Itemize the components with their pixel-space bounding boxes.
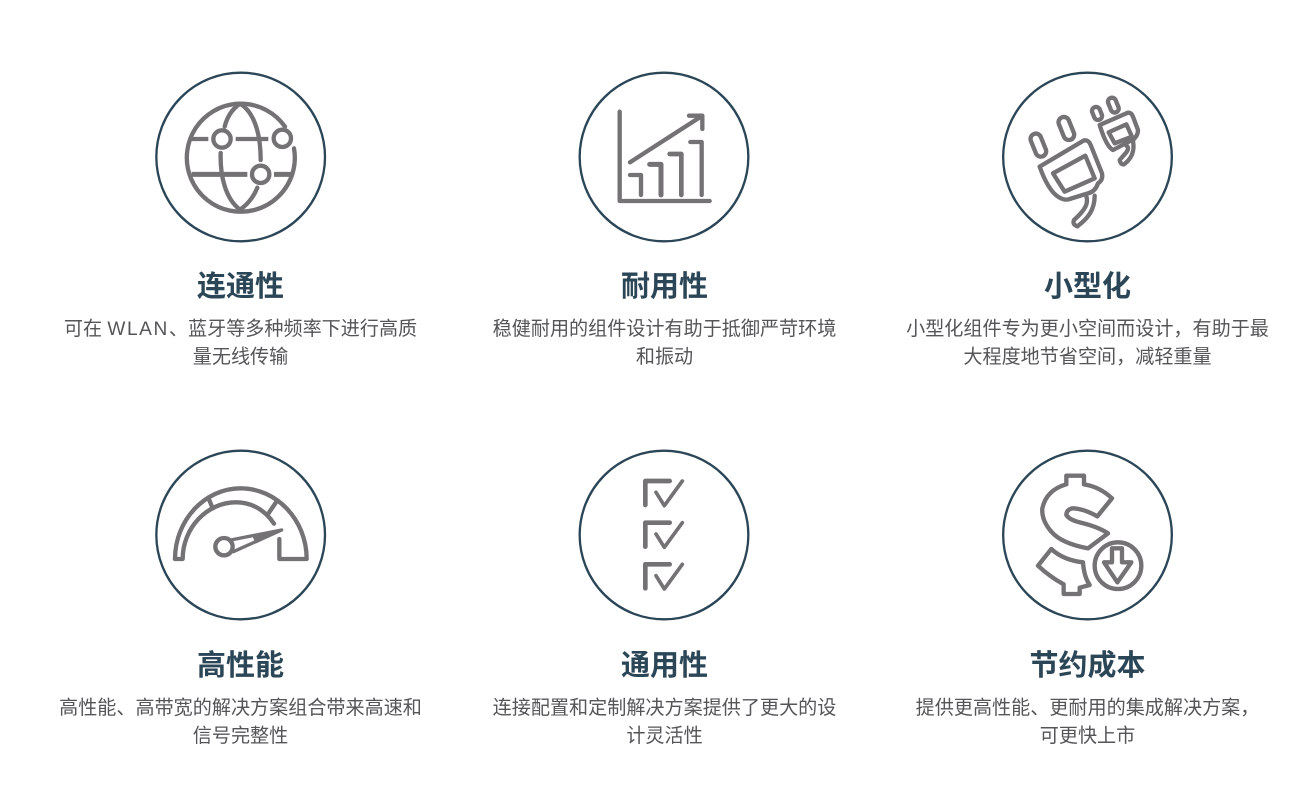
description: 稳健耐用的组件设计有助于抵御严苛环境	[493, 319, 836, 340]
icon: dollar with down arrow	[1002, 450, 1173, 620]
description	[493, 318, 836, 368]
description: 提供更高性能、更耐用的集成解决方案，	[916, 698, 1259, 719]
heading: 高性能	[197, 650, 284, 682]
heading: 连通性	[197, 271, 284, 303]
description: 可在 WLAN、蓝牙等多种频率下进行高质	[64, 319, 417, 340]
icon: two plugs	[1002, 72, 1173, 242]
icon: speedometer	[155, 450, 326, 620]
description	[906, 318, 1269, 368]
description	[916, 697, 1259, 747]
panel: connectivity	[64, 72, 417, 368]
icon: checklist	[578, 450, 750, 620]
heading: 小型化	[1044, 271, 1131, 303]
panel: durability	[493, 72, 836, 368]
heading: 通用性	[621, 650, 708, 682]
description: 小型化组件专为更小空间而设计，有助于最	[906, 319, 1269, 340]
description: 计灵活性	[626, 726, 703, 747]
icon: rising bar chart	[578, 72, 750, 242]
description	[493, 697, 836, 747]
description: 高性能、高带宽的解决方案组合带来高速和	[59, 698, 422, 719]
icon: globe network	[155, 72, 326, 242]
description: 大程度地节省空间，减轻重量	[963, 347, 1212, 368]
description	[59, 697, 422, 747]
description: 连接配置和定制解决方案提供了更大的设	[493, 698, 836, 719]
description: 信号完整性	[193, 726, 288, 747]
heading: 耐用性	[621, 271, 708, 303]
description: 和振动	[636, 347, 693, 368]
panel: cost savings	[916, 450, 1259, 747]
description: 可更快上市	[1040, 726, 1135, 747]
description: 量无线传输	[193, 347, 288, 368]
panel: versatility	[493, 450, 836, 747]
heading: 节约成本	[1029, 650, 1146, 682]
description	[64, 318, 417, 368]
panel: high performance	[59, 450, 422, 747]
panel: miniaturization	[906, 72, 1269, 368]
